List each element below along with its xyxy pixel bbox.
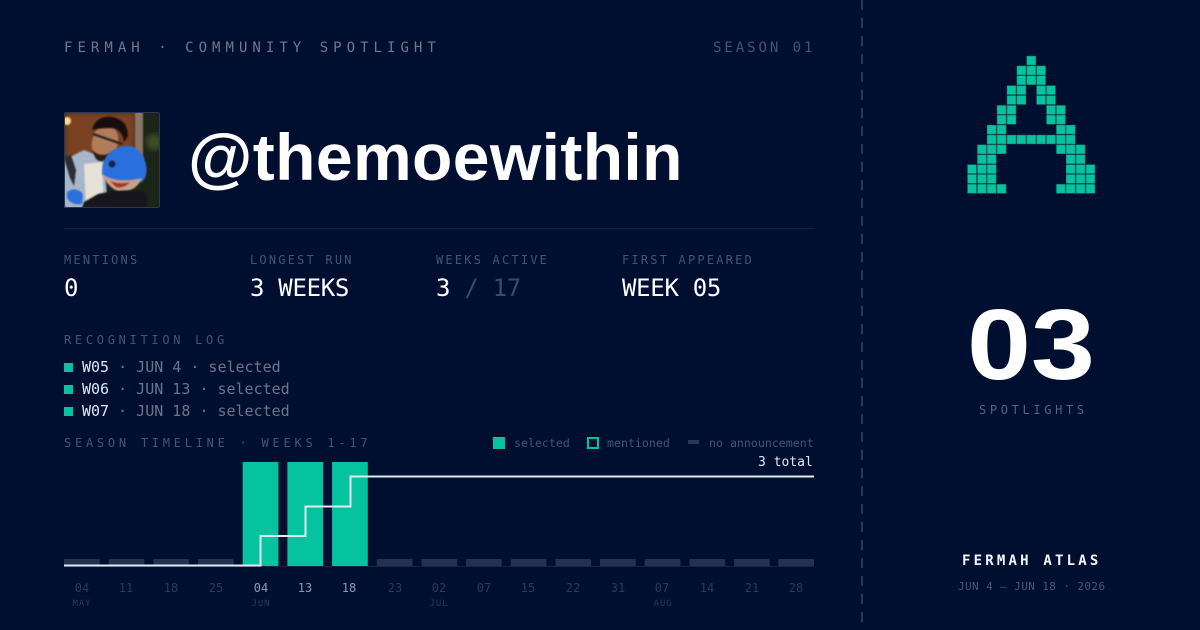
- stat: mentions: 0: [64, 274, 78, 302]
- legend: mentioned: [607, 436, 670, 450]
- avatar: [64, 112, 160, 208]
- week date labels: 25: [209, 581, 223, 595]
- week date labels: 31: [611, 581, 625, 595]
- legend: selected: [514, 436, 570, 450]
- header: brand line: FERMAH · COMMUNITY SPOTLIGHT: [64, 40, 441, 56]
- stat: first appeared: [622, 253, 754, 302]
- month labels: [73, 599, 672, 609]
- stat: mentions: MENTIONS: [64, 253, 139, 267]
- week date labels: 14: [700, 581, 714, 595]
- spotlights label: SPOTLIGHTS: [979, 403, 1088, 417]
- stat: weeks active: 3 / 17: [436, 274, 521, 302]
- week date labels: 04: [254, 581, 268, 595]
- footer brand: FERMAH ATLAS: [962, 553, 1102, 569]
- pixel logo A: [967, 56, 1096, 194]
- month labels: MAY: [73, 599, 91, 609]
- week date labels: 21: [745, 581, 759, 595]
- week date labels: 11: [119, 581, 133, 595]
- divider rule: [64, 228, 814, 229]
- stat: longest run: [250, 253, 354, 302]
- week date labels: 07: [655, 581, 669, 595]
- header: season: SEASON 01: [713, 40, 815, 56]
- week date labels: 13: [298, 581, 312, 595]
- stat: weeks active: WEEKS ACTIVE: [436, 253, 549, 267]
- week date labels: 22: [566, 581, 580, 595]
- recognition log list: W07 · JUN 18 · selected: [82, 402, 290, 420]
- week date labels: [75, 581, 803, 595]
- spotlight count: 03: [967, 289, 1095, 401]
- week date labels: 18: [342, 581, 356, 595]
- month labels: JUL: [430, 599, 448, 609]
- divider: [861, 0, 863, 622]
- stat: first appeared: FIRST APPEARED: [622, 253, 754, 267]
- stat: mentions: [64, 253, 139, 302]
- legend: no announcement: [709, 436, 814, 450]
- stat: first appeared: WEEK 05: [622, 274, 721, 302]
- recognition log heading: RECOGNITION LOG: [64, 333, 228, 347]
- stat: longest run: LONGEST RUN: [250, 253, 354, 267]
- footer date range: JUN 4 — JUN 18 · 2026: [958, 580, 1105, 593]
- week date labels: 28: [789, 581, 803, 595]
- legend: [493, 436, 814, 450]
- week date labels: 23: [388, 581, 402, 595]
- weekly bars: [64, 462, 814, 566]
- week date labels: 02: [432, 581, 446, 595]
- month labels: AUG: [654, 599, 672, 609]
- month labels: JUN: [252, 599, 270, 609]
- timeline chart: [64, 462, 814, 609]
- week date labels: 15: [521, 581, 535, 595]
- stat: longest run: 3 WEEKS: [250, 274, 349, 302]
- stat: weeks active: [436, 253, 549, 302]
- recognition log list: [64, 358, 290, 420]
- timeline total label: 3 total: [758, 455, 813, 470]
- week date labels: 04: [75, 581, 89, 595]
- week date labels: 18: [164, 581, 178, 595]
- recognition log list: W05 · JUN 4 · selected: [82, 358, 281, 376]
- handle heading: @themoewithin: [188, 120, 683, 194]
- cumulative step line: [64, 476, 814, 566]
- timeline heading: SEASON TIMELINE · WEEKS 1-17: [64, 436, 371, 450]
- week date labels: 07: [477, 581, 491, 595]
- recognition log list: W06 · JUN 13 · selected: [82, 380, 290, 398]
